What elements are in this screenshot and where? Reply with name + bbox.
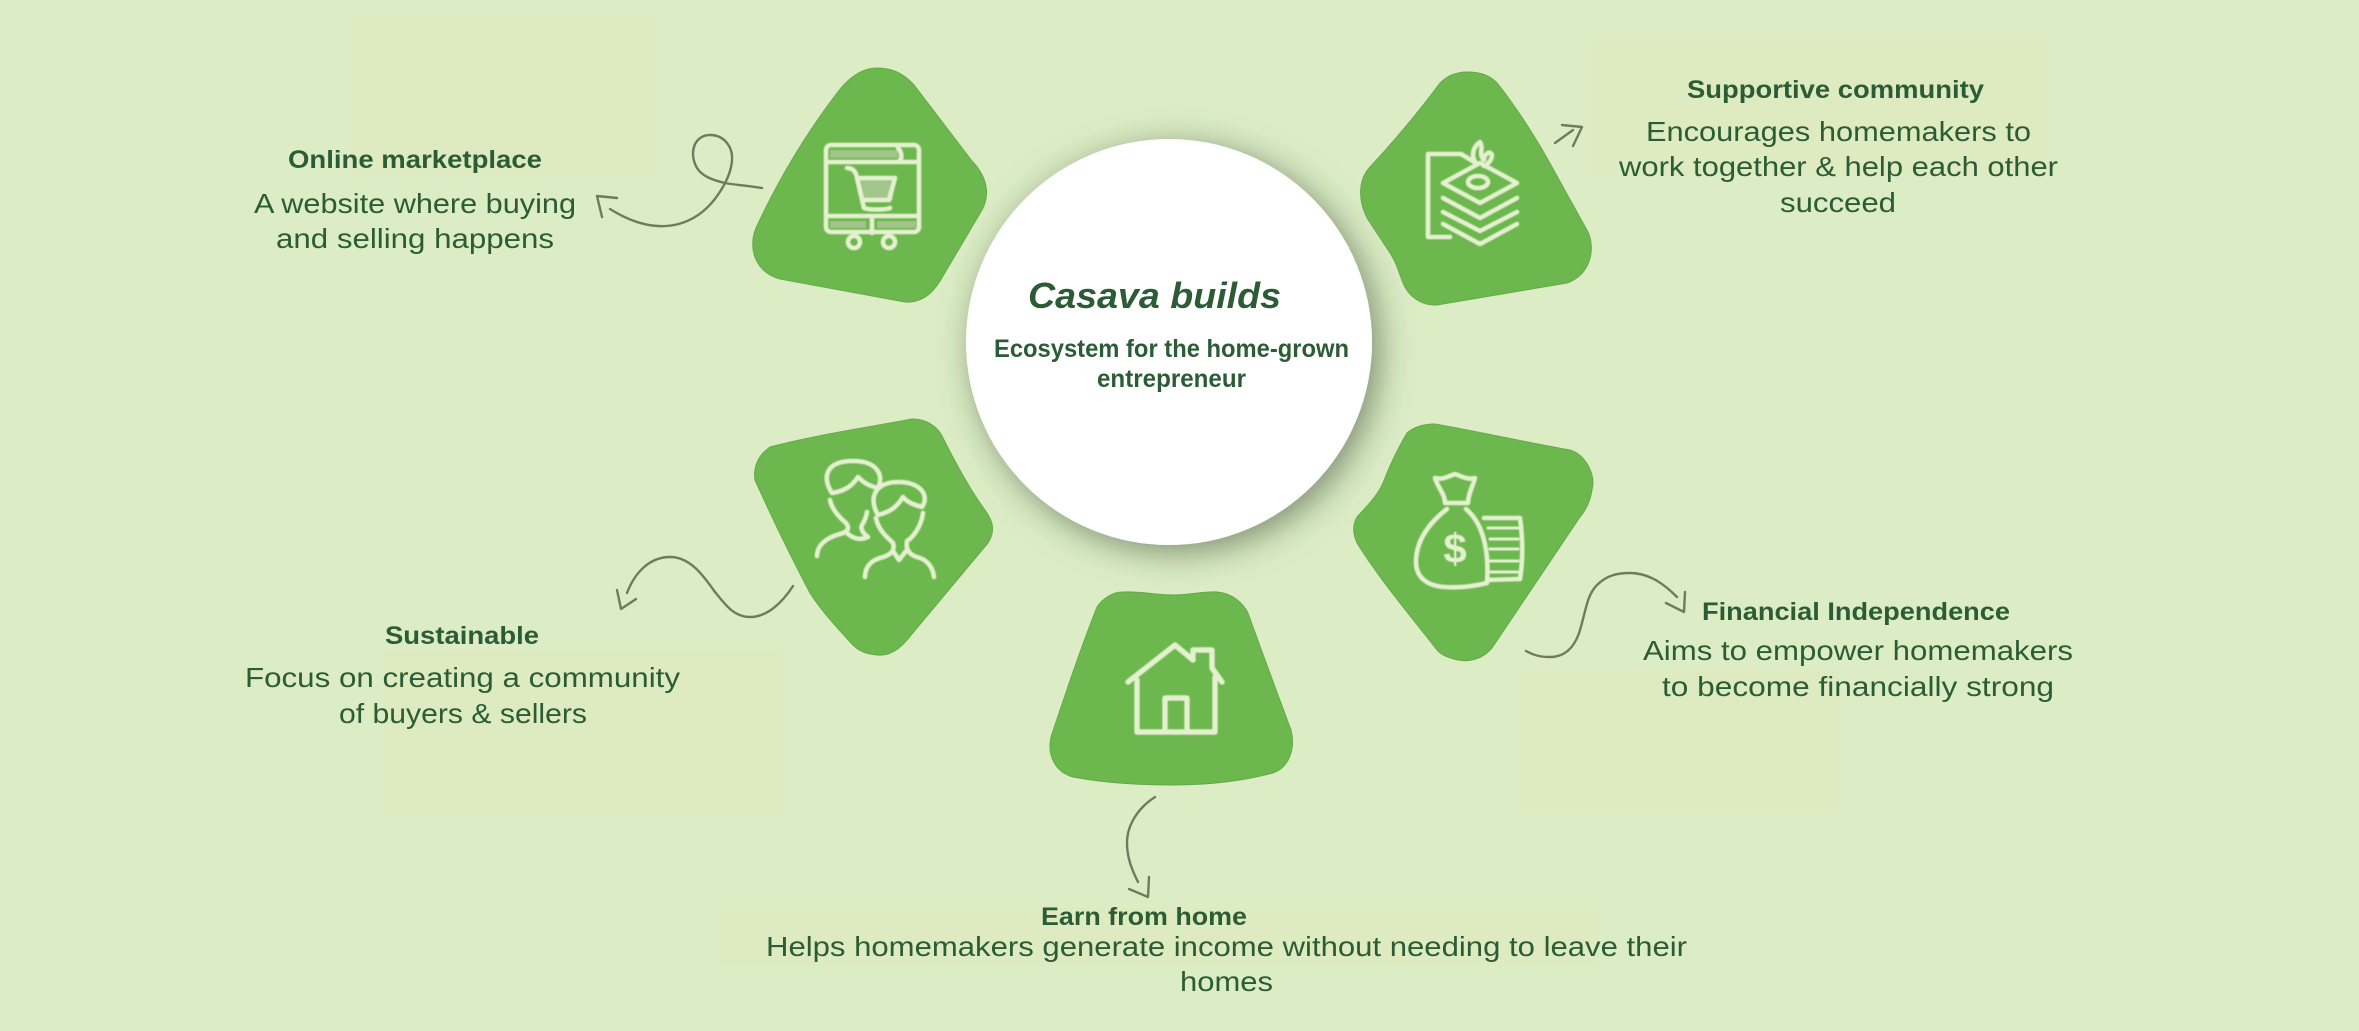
arrow: to supportive community (1555, 125, 1582, 146)
label: supportive community: work together & help each other (1618, 151, 2058, 182)
label: earn from home: homes (1180, 966, 1273, 997)
shape: community blob (1361, 72, 1591, 305)
shape: marketplace blob (753, 68, 987, 302)
centre title: Casava builds (1028, 275, 1281, 316)
label: earn from home (766, 903, 1687, 997)
faint patch: supportive community (1589, 38, 2050, 176)
faint patch: sustainable (384, 650, 782, 815)
label: financial independence: Financial Independence (1702, 598, 2010, 626)
label: sustainable: Focus on creating a community (245, 662, 680, 693)
centre subtitle: entrepreneur (1097, 365, 1246, 393)
label: online marketplace: Online marketplace (288, 146, 542, 174)
panel: online marketplace (254, 68, 987, 302)
label: financial independence: Aims to empower homemakers (1643, 635, 2073, 666)
shape: sustainable blob (755, 419, 993, 655)
centre subtitle (994, 335, 1349, 393)
shape: home blob (1050, 592, 1292, 785)
label: online marketplace (254, 146, 576, 254)
label: earn from home: Helps homemakers generate income without needing to leave their (766, 931, 1687, 962)
icon: money bag and coins: $ (1443, 525, 1467, 572)
label: online marketplace: and selling happens (276, 223, 554, 254)
label: supportive community: succeed (1780, 187, 1896, 218)
label: earn from home: Earn from home (1041, 903, 1247, 931)
arrow: to earn from home (1127, 797, 1155, 897)
icon: web shop cart (826, 145, 919, 248)
panel: sustainable (245, 419, 993, 729)
label: supportive community: Supportive community (1687, 76, 1984, 104)
label: sustainable: Sustainable (385, 622, 539, 650)
arrow: to financial independence (1526, 573, 1685, 657)
icon: house (1128, 645, 1222, 732)
label: financial independence: to become financially strong (1662, 671, 2054, 702)
shape: financial blob (1354, 424, 1593, 661)
label: sustainable (245, 622, 680, 729)
panel: supportive community (1361, 72, 2058, 305)
label: supportive community: Encourages homemakers to (1646, 116, 2031, 147)
label: sustainable: of buyers & sellers (339, 698, 587, 729)
panel: earn from home (766, 592, 1687, 997)
label: online marketplace: A website where buying (254, 188, 576, 219)
icon: layered stack with hand (1428, 142, 1517, 244)
faint patch: online marketplace (349, 15, 656, 178)
icon: money bag and coins (1416, 474, 1522, 587)
label: financial independence (1643, 598, 2073, 702)
faint patch: earn from home (720, 908, 1598, 966)
centre circle (966, 139, 1372, 545)
label: supportive community (1618, 76, 2058, 218)
arrow: to sustainable (617, 557, 793, 617)
centre subtitle: Ecosystem for the home-grown (994, 335, 1349, 363)
faint patch: financial independence (1517, 669, 1838, 812)
icon: two people (817, 461, 934, 577)
arrow: to online marketplace (597, 135, 762, 226)
panel: financial independence (1354, 424, 2073, 702)
